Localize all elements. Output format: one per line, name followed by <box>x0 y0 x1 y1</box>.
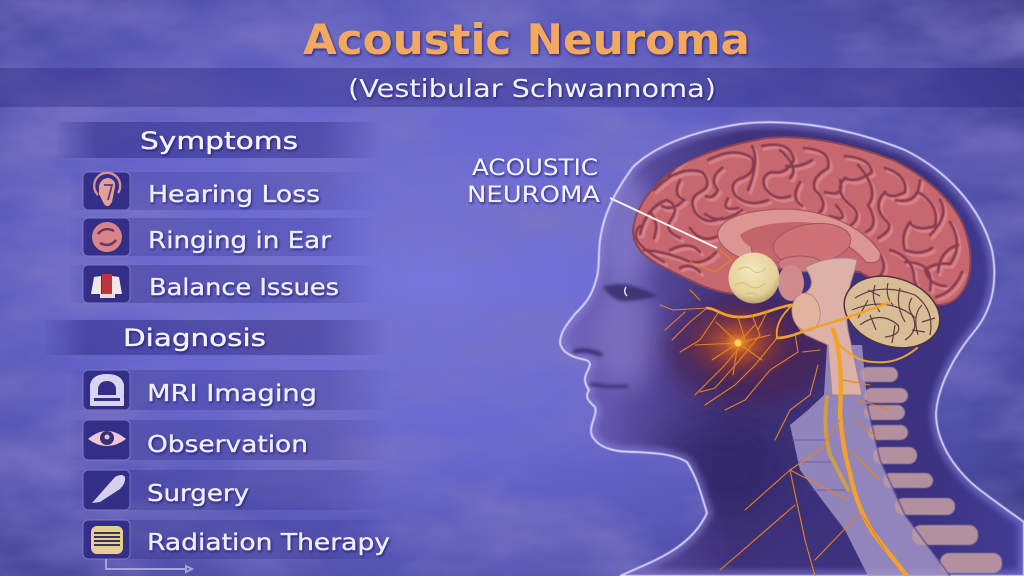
row: radiation therapy: Radiation Therapy <box>147 530 390 556</box>
title band <box>0 68 1024 107</box>
row: radiation therapy <box>70 520 400 559</box>
row: hearing loss <box>70 172 380 210</box>
arrow: radiation <box>106 559 192 572</box>
row: balance issues: Balance Issues <box>149 275 339 301</box>
row: ringing in ear: Ringing in Ear <box>148 228 332 254</box>
fine nerve branches <box>660 250 890 576</box>
panel: diagnosis <box>45 320 400 572</box>
row: ringing in ear <box>70 218 380 256</box>
vertebrae <box>860 367 1002 573</box>
head silhouette <box>540 110 1024 576</box>
row: mri imaging: MRI Imaging <box>147 381 317 407</box>
row: surgery: Surgery <box>147 481 249 507</box>
row: observation: Observation <box>147 432 308 458</box>
row: balance issues <box>70 265 380 303</box>
symptoms heading band <box>58 122 383 158</box>
eye <box>603 284 657 301</box>
pointer line <box>610 198 717 248</box>
skull inner glow <box>560 122 1024 576</box>
diagnosis heading band <box>45 320 390 355</box>
cortex gyri <box>636 145 964 300</box>
nerve glow <box>676 299 800 387</box>
row: observation <box>70 420 390 460</box>
row: mri imaging <box>70 370 390 410</box>
nerves <box>660 250 917 576</box>
head outline <box>560 122 1024 576</box>
row: hearing loss: Hearing Loss <box>148 182 320 208</box>
label: acoustic neuroma <box>467 156 600 208</box>
label: acoustic neuroma: NEUROMA <box>467 183 600 208</box>
heading: diagnosis: Diagnosis <box>123 324 266 352</box>
tumor <box>728 252 780 304</box>
brain <box>633 137 971 395</box>
label: acoustic neuroma: ACOUSTIC <box>472 156 598 181</box>
cerebellum <box>835 265 949 359</box>
row: surgery <box>70 470 390 510</box>
nerve hot spot <box>734 340 742 346</box>
pons and brainstem <box>778 258 862 395</box>
panel: symptoms <box>58 122 383 303</box>
corpus callosum <box>718 209 880 266</box>
main nerve trunks <box>707 302 917 576</box>
thalamus <box>740 219 853 272</box>
title: Acoustic Neuroma <box>303 15 750 64</box>
nostril and mouth <box>573 351 628 387</box>
heading: symptoms: Symptoms <box>140 127 298 155</box>
subtitle: (Vestibular Schwannoma) <box>348 74 716 103</box>
spinal column <box>790 345 950 576</box>
spine <box>790 345 1002 576</box>
